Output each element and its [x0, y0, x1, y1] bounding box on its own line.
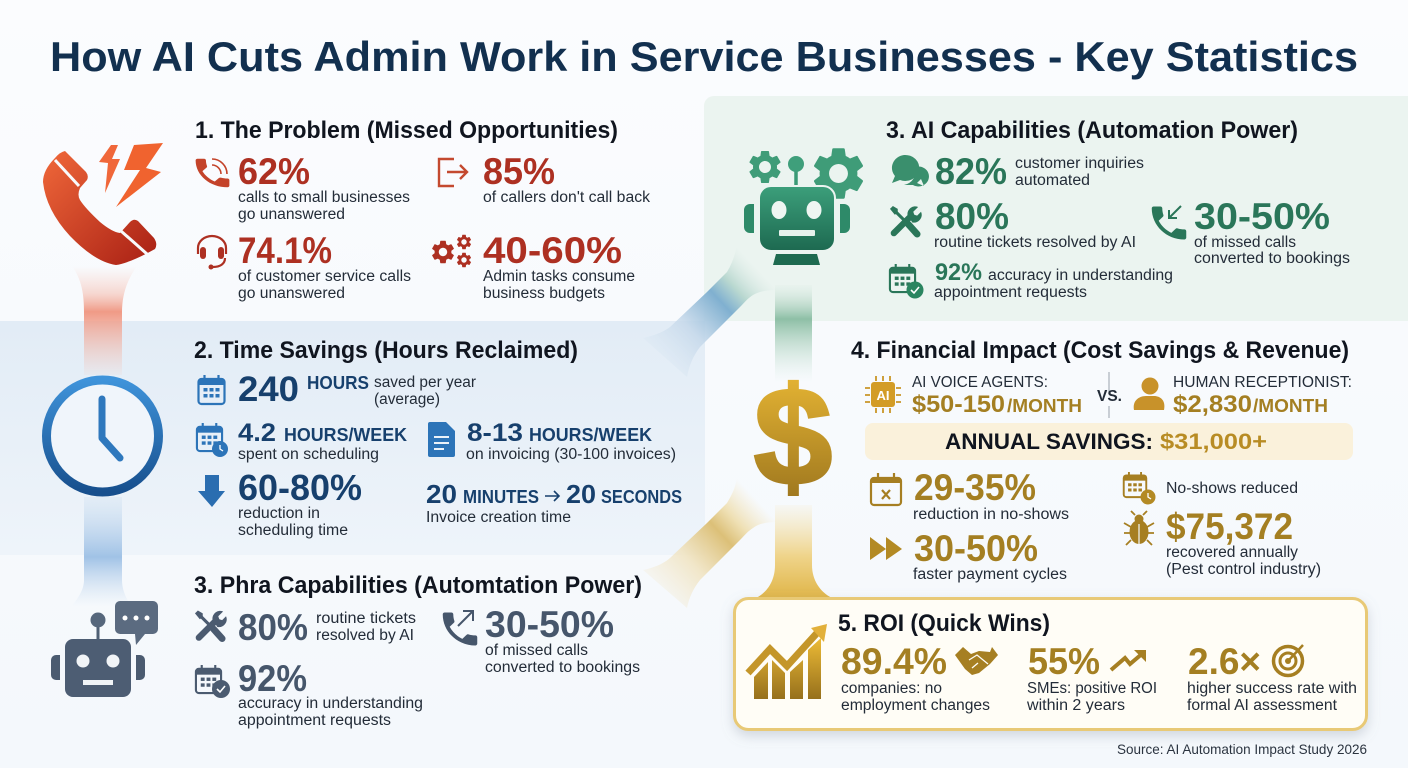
stat: 4.2 hours/week: HOURS/WEEK: [284, 425, 407, 445]
icon: dollar sign: $: [754, 360, 832, 514]
stat: 4.2 hours/week: spent on scheduling: [238, 446, 379, 463]
stat: 30-50%: of missed calls: [485, 642, 588, 659]
connector: blue: [72, 497, 131, 606]
heading: AI capabilities: 3. AI Capabilities (Automation Power): [886, 117, 1298, 144]
stat: $75,372: recovered annually: [1166, 544, 1298, 561]
comparison: human receptionist: /MONTH: [1253, 396, 1328, 416]
stat: 89.4%: companies: no: [841, 680, 942, 697]
stat: 92%: appointment requests: [238, 712, 391, 729]
stat: 60-80%: [198, 467, 362, 539]
stat: 40-60%: Admin tasks consume: [483, 268, 635, 285]
heading: financial impact: 4. Financial Impact (Cost Savings & Revenue): [851, 337, 1349, 364]
stat: 30-50%: converted to bookings: [485, 659, 640, 676]
stat: 60-80%: scheduling time: [238, 522, 348, 539]
stat: 82%: 82%: [935, 151, 1007, 192]
stat: 80%: 80%: [238, 607, 308, 648]
callout: annual savings: [865, 423, 1353, 460]
callout: annual savings: $31,000+: [1160, 429, 1267, 454]
stat: 240 hours: saved per year: [374, 374, 476, 391]
connector: green: [775, 285, 812, 382]
stat: 74.1%: [198, 230, 411, 302]
icon: clock: [46, 380, 158, 492]
stat: 2.6x: higher success rate with: [1187, 680, 1357, 697]
heading: the problem: 1. The Problem (Missed Opportunities): [195, 117, 618, 144]
stat: 240 hours: 240: [238, 370, 299, 409]
stat: 20 minutes to 20 seconds: SECONDS: [601, 487, 682, 507]
stat: 55%: 55%: [1028, 641, 1100, 682]
stat: 82%: [892, 151, 1144, 192]
heading: time savings: 2. Time Savings (Hours Reclaimed): [194, 337, 578, 364]
stat: 89.4%: 89.4%: [841, 641, 947, 682]
stat: 30-50%: 30-50%: [1194, 196, 1330, 237]
stat: 55%: [1026, 641, 1157, 714]
stat: 30-50%: [1152, 196, 1350, 267]
stat: 85%: of callers don't call back: [483, 189, 650, 206]
stat: 92%: accuracy in understanding: [238, 695, 423, 712]
stat: 30-50%: of missed calls: [1194, 234, 1296, 251]
stat: 62%: 62%: [238, 151, 310, 192]
stat: 30-50%: converted to bookings: [1194, 250, 1350, 267]
stat: 20 minutes to 20 seconds: 20: [566, 479, 596, 509]
stat: 8-13 hours/week: HOURS/WEEK: [529, 425, 652, 445]
stat: 80%: 80%: [935, 196, 1009, 237]
stat: 89.4%: [841, 641, 998, 714]
comparison: AI voice agents: $50-150: [912, 391, 1005, 418]
connector: gold diagonal: [643, 477, 777, 608]
section 3 left: capabilities: [194, 572, 642, 729]
stat: $75,372: [1124, 506, 1321, 578]
stat: 62%: [196, 151, 410, 223]
stat: 20 minutes to 20 seconds: MINUTES: [463, 487, 539, 507]
stat: 60-80%: 60-80%: [238, 467, 362, 508]
connector: gold: [756, 505, 832, 598]
panel: time savings band: [0, 321, 705, 555]
panel: AI capabilities background: [704, 96, 1408, 321]
callout: annual savings: ANNUAL SAVINGS:: [945, 429, 1153, 454]
stat: 40-60%: business budgets: [483, 285, 605, 302]
source note: Source: AI Automation Impact Study 2026: [1117, 741, 1367, 757]
stat: 92%: 92%: [935, 259, 982, 286]
stat: 92%: [890, 259, 1173, 301]
stat: 92%: 92%: [238, 658, 307, 699]
icon: phone with lightning: [43, 143, 163, 265]
comparison: AI voice agents: AI VOICE AGENTS:: [912, 374, 1048, 391]
stat: 240 hours: HOURS: [307, 373, 369, 393]
comparison: human receptionist: $2,830: [1173, 391, 1252, 418]
icon: rising bar chart: [748, 624, 827, 699]
comparison: human receptionist: HUMAN RECEPTIONIST:: [1173, 374, 1352, 391]
comparison: vs divider: [1097, 372, 1122, 418]
stat: 82%: customer inquiries: [1015, 155, 1144, 172]
stat: 20 minutes to 20 seconds: 20: [426, 479, 457, 509]
stat: 80%: resolved by AI: [316, 627, 414, 644]
stat: 20 minutes to 20 seconds: [426, 479, 682, 526]
stat: 55%: within 2 years: [1026, 697, 1125, 714]
stat: 30-50%: [443, 604, 640, 676]
stat: 74.1%: go unanswered: [238, 285, 345, 302]
stat: 80%: routine tickets: [316, 610, 416, 627]
stat: 74.1%: of customer service calls: [238, 268, 411, 285]
stat: 40-60%: 40-60%: [483, 230, 622, 271]
panel: ROI: [734, 598, 1366, 730]
comparison: AI voice agents: AI: [876, 388, 890, 403]
comparison: human receptionist: [1134, 374, 1352, 418]
stat: 92%: appointment requests: [934, 284, 1087, 301]
stat: 30-50% faster: 30-50%: [914, 528, 1038, 569]
stat: 30-50% faster: [870, 528, 1067, 583]
stat: 240 hours: (average): [374, 391, 440, 408]
stat: 30-50% faster: faster payment cycles: [913, 566, 1067, 583]
stat: 2.6x: [1187, 641, 1357, 714]
stat: 60-80%: reduction in: [238, 505, 320, 522]
stat: 4.2 hours/week: [197, 419, 407, 463]
stat: 85%: 85%: [483, 151, 555, 192]
stat: 2.6x: 2.6×: [1188, 641, 1261, 682]
stat: 30-50%: 30-50%: [485, 604, 614, 645]
section 4: financial impact: [851, 337, 1353, 583]
comparison: vs divider: VS.: [1097, 388, 1122, 405]
stat: 82%: automated: [1015, 172, 1090, 189]
stat: 85%: [439, 151, 650, 206]
stat: no-shows reduced: No-shows reduced: [1166, 480, 1298, 497]
stat: 55%: SMEs: positive ROI: [1027, 680, 1157, 697]
stat: 80%: routine tickets resolved by AI: [934, 234, 1136, 251]
comparison: AI voice agents: /MONTH: [1007, 396, 1082, 416]
stat: 92%: accuracy in understanding: [988, 267, 1173, 284]
stat: 8-13 hours/week: on invoicing (30-100 invoices): [466, 446, 676, 463]
heading: ROI: 5. ROI (Quick Wins): [838, 610, 1050, 637]
stat: 62%: calls to small businesses: [238, 189, 410, 206]
stat: 89.4%: employment changes: [841, 697, 990, 714]
heading: capabilities: 3. Phra Capabilities (Automtation Power): [194, 572, 642, 599]
stat: 29-35%: [871, 467, 1069, 523]
connector: red: [72, 266, 137, 375]
stat: 8-13 hours/week: 8-13: [467, 419, 523, 447]
stat: $75,372: (Pest control industry): [1166, 561, 1321, 578]
stat: 240 hours: [198, 370, 476, 409]
stat: 74.1%: 74.1%: [238, 230, 332, 271]
stat: 92%: [196, 658, 423, 729]
stat: 2.6x: formal AI assessment: [1187, 697, 1338, 714]
stat: 80%: [195, 607, 416, 648]
section 1: the problem: [195, 117, 650, 302]
section 3 right: AI capabilities: [886, 117, 1350, 301]
stat: 29-35%: reduction in no-shows: [913, 506, 1069, 523]
stat: 4.2 hours/week: 4.2: [238, 419, 276, 447]
connector: blue diagonal: [643, 243, 777, 377]
title: How AI Cuts Admin Work in Service Businesses - Key Statistics: [50, 33, 1358, 80]
stat: $75,372: $75,372: [1166, 506, 1293, 547]
section 2: time savings: [194, 337, 682, 539]
icon: green robot with gears: [744, 148, 863, 265]
stat: 8-13 hours/week: [428, 419, 676, 463]
stat: 62%: go unanswered: [238, 206, 345, 223]
stat: no-shows reduced: [1124, 472, 1298, 504]
icon: gray robot with speech bubble: [51, 601, 158, 697]
stat: 20 minutes to 20 seconds: Invoice creation time: [426, 509, 571, 526]
stat: 40-60%: [432, 230, 635, 302]
stat: 29-35%: 29-35%: [914, 467, 1036, 508]
comparison: AI voice agents: [865, 374, 1082, 418]
stat: 80%: [890, 196, 1136, 251]
